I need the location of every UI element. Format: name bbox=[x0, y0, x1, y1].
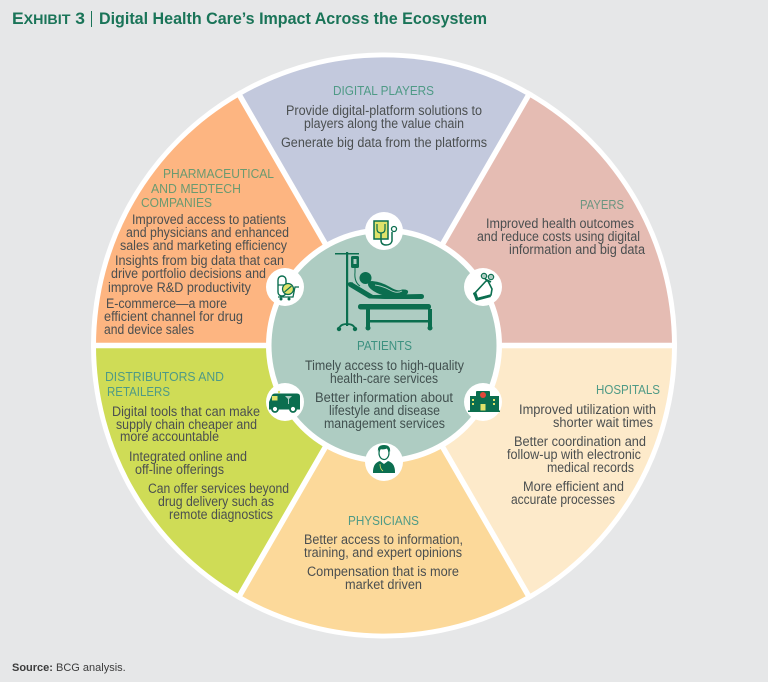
panel: patients hub: lifestyle and disease bbox=[329, 403, 440, 418]
icon: tablet and stethoscope bbox=[365, 212, 403, 250]
title: EXHIBIT 3 bbox=[12, 10, 85, 28]
title: Digital Health Care’s Impact Across the Ecosystem bbox=[99, 10, 487, 28]
panel: payers bbox=[384, 96, 672, 346]
panel: physicians bbox=[240, 346, 528, 634]
panel: digital players: DIGITAL PLAYERS bbox=[333, 83, 434, 98]
panel: pharmaceutical and medtech companies: drive portfolio decisions and bbox=[111, 266, 266, 281]
icon: doctor bbox=[365, 443, 403, 481]
panel: distributors and retailers: Integrated online and bbox=[129, 449, 247, 464]
panel: hospitals: Improved utilization with bbox=[519, 402, 656, 417]
panel: hospitals: medical records bbox=[547, 460, 634, 475]
panel: physicians: Compensation that is more bbox=[307, 564, 459, 579]
panel: payers: Improved health outcomes bbox=[486, 216, 634, 231]
panel: hospitals: More efficient and bbox=[523, 479, 624, 494]
panel: pharmaceutical and medtech companies: E-commerce—a more bbox=[106, 296, 227, 311]
ecosystem wheel backing bbox=[91, 52, 677, 638]
panel: digital players: Generate big data from the platforms bbox=[281, 135, 487, 150]
panel: payers: information and big data bbox=[509, 242, 646, 257]
panel: digital players bbox=[240, 57, 528, 345]
panel: distributors and retailers: off-line offerings bbox=[135, 462, 224, 477]
panel: distributors and retailers: remote diagnostics bbox=[169, 507, 273, 522]
panel: payers: and reduce costs using digital bbox=[477, 229, 640, 244]
icon: ambulance bbox=[266, 383, 304, 421]
panel: pharmaceutical and medtech companies: PHARMACEUTICAL bbox=[163, 166, 274, 181]
panel: distributors and retailers: supply chain cheaper and bbox=[116, 417, 257, 432]
panel: pharmaceutical and medtech companies bbox=[96, 96, 384, 346]
panel: pharmaceutical and medtech companies: Insights from big data that can bbox=[115, 253, 284, 268]
panel: distributors and retailers: RETAILERS bbox=[107, 384, 170, 399]
icon: medicine cart bbox=[266, 268, 304, 306]
panel: physicians: market driven bbox=[345, 577, 422, 592]
panel: hospitals: accurate processes bbox=[511, 492, 615, 507]
panel: distributors and retailers bbox=[96, 346, 384, 595]
panel: pharmaceutical and medtech companies: Improved access to patients bbox=[132, 212, 286, 227]
panel: distributors and retailers: DISTRIBUTORS AND bbox=[105, 369, 224, 384]
panel: pharmaceutical and medtech companies: efficient channel for drug bbox=[104, 309, 243, 324]
panel: hospitals: HOSPITALS bbox=[596, 382, 660, 397]
panel: distributors and retailers: Digital tools that can make bbox=[112, 404, 260, 419]
panel: hospitals: Better coordination and bbox=[514, 434, 646, 449]
panel: patients hub: PATIENTS bbox=[357, 338, 412, 353]
panel: patients hub: health-care services bbox=[330, 371, 438, 386]
panel: distributors and retailers: Can offer services beyond bbox=[148, 481, 289, 496]
panel: pharmaceutical and medtech companies: improve R&D productivity bbox=[108, 280, 251, 295]
panel: digital players: Provide digital-platform solutions to bbox=[286, 103, 482, 118]
panel: patients hub: Better information about bbox=[315, 390, 453, 405]
panel: payers: PAYERS bbox=[580, 197, 624, 212]
panel: patients hub bbox=[266, 228, 502, 464]
panel: physicians: PHYSICIANS bbox=[348, 513, 419, 528]
panel: patients hub: Timely access to high-quality bbox=[305, 358, 464, 373]
panel: pharmaceutical and medtech companies: and device sales bbox=[104, 322, 194, 337]
icon: hospital building bbox=[464, 383, 502, 421]
source note: Source: BCG analysis. bbox=[12, 662, 126, 674]
panel: pharmaceutical and medtech companies: and physicians and enhanced bbox=[126, 225, 289, 240]
panel: hospitals: shorter wait times bbox=[553, 415, 653, 430]
panel: distributors and retailers: more accountable bbox=[120, 429, 219, 444]
icon: patient in hospital bed bbox=[335, 252, 432, 331]
panel: hospitals: follow-up with electronic bbox=[507, 447, 641, 462]
panel: digital players: players along the value chain bbox=[304, 116, 464, 131]
panel: pharmaceutical and medtech companies: COMPANIES bbox=[141, 195, 212, 210]
icon: money bag bbox=[464, 268, 502, 306]
panel: patients hub: management services bbox=[324, 416, 445, 431]
panel: pharmaceutical and medtech companies: sales and marketing efficiency bbox=[120, 238, 287, 253]
panel: physicians: Better access to information, bbox=[304, 532, 463, 547]
panel: distributors and retailers: drug delivery such as bbox=[158, 494, 274, 509]
panel: physicians: training, and expert opinions bbox=[304, 545, 462, 560]
panel: pharmaceutical and medtech companies: AND MEDTECH bbox=[151, 181, 241, 196]
panel: hospitals bbox=[384, 346, 672, 595]
